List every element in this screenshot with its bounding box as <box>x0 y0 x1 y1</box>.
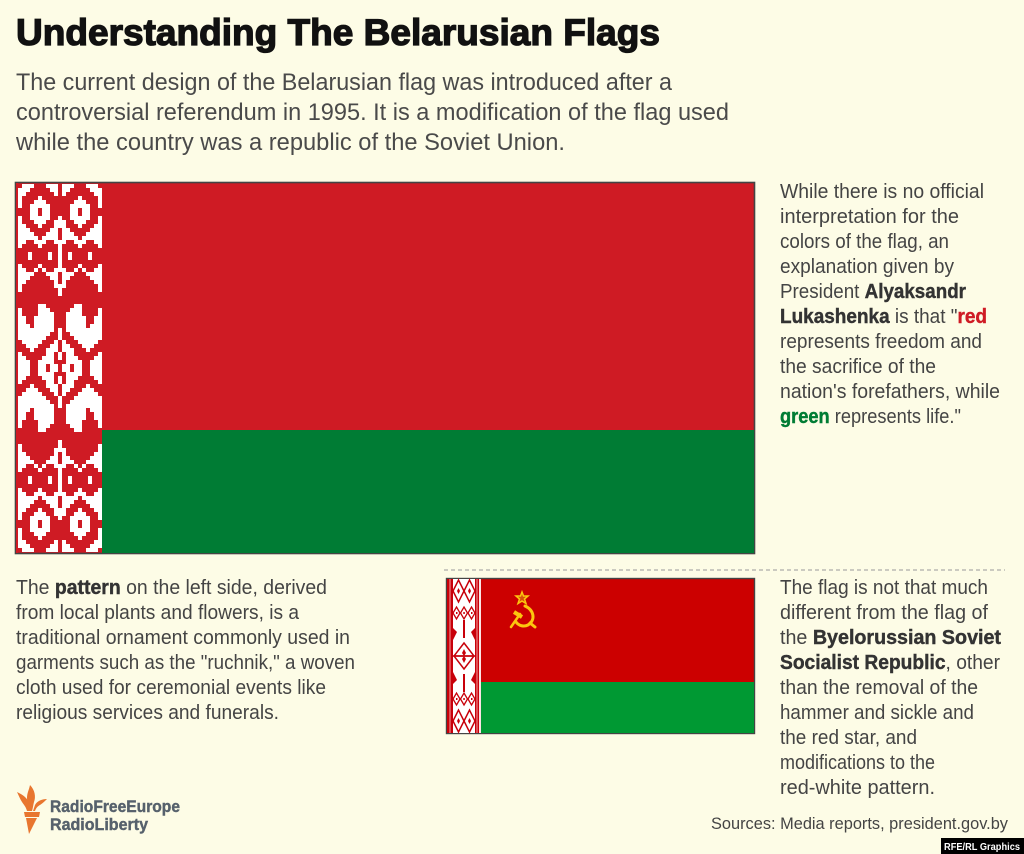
text: comparison with BSSR flag: red-white pattern. <box>780 777 935 799</box>
icon: hammer and sickle <box>511 606 535 627</box>
intro text: The current design of the Belarusian flag was introduced after a <box>16 69 673 96</box>
text: colour interpretation: the sacrifice of the <box>780 356 936 378</box>
credit badge: RFE/RL Graphics <box>944 842 1020 853</box>
intro text <box>15 69 729 156</box>
text: colour interpretation: President Alyaksandr <box>780 281 966 303</box>
logo: RadioFreeEurope RadioLiberty <box>17 785 180 834</box>
text: comparison with BSSR flag: the red star, and <box>780 727 917 749</box>
ornament pattern <box>18 184 102 552</box>
text: pattern explanation: from local plants and flowers, is a <box>16 602 300 624</box>
green band <box>481 682 754 733</box>
text: pattern explanation: cloth used for ceremonial events like <box>16 677 326 699</box>
intro text: while the country was a republic of the Soviet Union. <box>15 129 565 156</box>
text: comparison with BSSR flag <box>780 577 1001 799</box>
text: comparison with BSSR flag: The flag is not that much <box>780 577 988 599</box>
green band <box>102 430 754 553</box>
intro text: controversial referendum in 1995. It is a modification of the flag used <box>16 99 729 126</box>
logo: RadioFreeEurope RadioLiberty: RadioFreeEurope <box>50 797 180 816</box>
text: colour interpretation: interpretation for the <box>780 206 959 228</box>
sources: Sources: Media reports, president.gov.by <box>711 814 1008 833</box>
text: colour interpretation: While there is no official <box>780 181 984 203</box>
text: colour interpretation: colors of the flag, an <box>780 231 949 253</box>
text: colour interpretation: Lukashenka is that "red <box>780 306 987 328</box>
text: pattern explanation: The pattern on the left side, derived <box>16 577 327 599</box>
text: pattern explanation: traditional ornament commonly used in <box>16 627 350 649</box>
logo: RadioFreeEurope RadioLiberty: RadioLiberty <box>50 815 149 834</box>
text: comparison with BSSR flag: Socialist Republic, other <box>780 652 1000 674</box>
text: colour interpretation: green represents life." <box>780 406 961 428</box>
text: colour interpretation <box>780 181 1000 428</box>
flag: current Belarusian flag <box>16 182 754 554</box>
text: colour interpretation: nation's forefathers, while <box>780 381 1000 403</box>
flag: Byelorussian SSR <box>446 578 754 734</box>
text: comparison with BSSR flag: the Byelorussian Soviet <box>780 627 1001 649</box>
text: comparison with BSSR flag: hammer and sickle and <box>780 702 974 724</box>
text: colour interpretation: represents freedom and <box>780 331 982 353</box>
ornament strip <box>447 579 481 733</box>
title: Understanding The Belarusian Flags <box>16 12 660 53</box>
icon: torch <box>17 785 47 834</box>
text: comparison with BSSR flag: different from the flag of <box>780 602 988 624</box>
text: colour interpretation: explanation given by <box>780 256 954 278</box>
text: pattern explanation: religious services and funerals. <box>16 702 279 724</box>
credit badge <box>941 838 1024 854</box>
icon: red star <box>516 592 528 604</box>
text: pattern explanation: garments such as the "ruchnik," a woven <box>16 652 355 674</box>
text: comparison with BSSR flag: modifications to the <box>780 752 935 774</box>
text: pattern explanation <box>16 577 355 724</box>
text: comparison with BSSR flag: than the removal of the <box>780 677 978 699</box>
